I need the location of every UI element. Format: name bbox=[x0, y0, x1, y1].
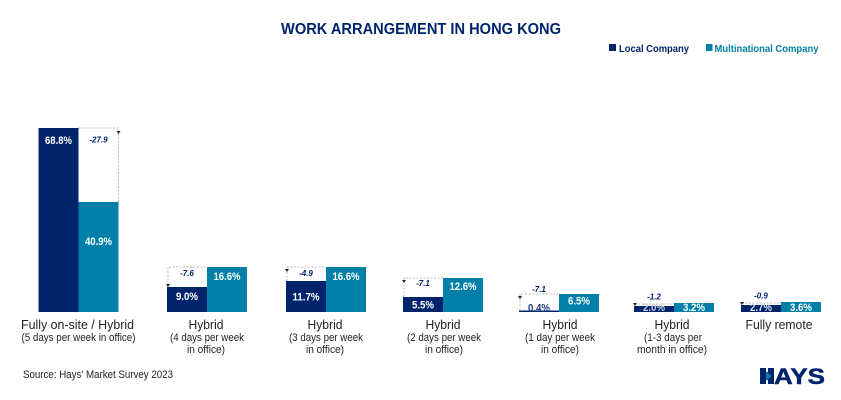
chart group: fully on-site: (5 days per week in office) bbox=[22, 332, 136, 344]
chart group: 3 days bbox=[285, 267, 366, 356]
chart group: 1 day bbox=[518, 285, 599, 356]
chart group: 4 days bbox=[166, 267, 247, 356]
chart group: 2 days: (2 days per week bbox=[407, 332, 481, 344]
chart group: 2 days: 12.6% bbox=[450, 281, 477, 293]
chart group: 1 day: 6.5% bbox=[568, 296, 590, 308]
chart group: 1-3 days per month: month in office) bbox=[637, 344, 707, 356]
chart group: 1-3 days per month: (1-3 days per bbox=[644, 332, 702, 344]
chart group: 2 days: -7.1 bbox=[416, 279, 430, 288]
chart group: fully on-site: -27.9 bbox=[89, 136, 108, 144]
chart group: 2 days: 5.5% bbox=[412, 300, 434, 312]
chart group: 1 day: -7.1 bbox=[532, 285, 546, 294]
chart group: 3 days: (3 days per week bbox=[289, 332, 363, 344]
chart group: 4 days: 16.6% bbox=[214, 271, 241, 283]
chart group: 1 day: (1 day per week bbox=[525, 332, 595, 344]
legend: Local Company bbox=[619, 43, 689, 55]
title: WORK ARRANGEMENT IN HONG KONG bbox=[281, 21, 561, 38]
source note: Source: Hays' Market Survey 2023 bbox=[23, 369, 173, 381]
chart group: 3 days: in office) bbox=[306, 344, 344, 356]
chart group: 4 days: (4 days per week bbox=[170, 332, 244, 344]
legend: Multinational Company bbox=[714, 43, 819, 55]
chart group: fully remote: Fully remote bbox=[746, 317, 812, 332]
logo: Hays bbox=[760, 364, 825, 389]
chart group: 4 days: Hybrid bbox=[188, 317, 224, 332]
chart group: fully on-site: 68.8% bbox=[45, 135, 72, 147]
chart group: fully remote: -0.9 bbox=[754, 292, 768, 300]
chart group: 1-3 days per month: -1.2 bbox=[647, 292, 661, 302]
logo: Hays: AYS bbox=[774, 364, 825, 389]
chart group: 1-3 days per month: 3.2% bbox=[683, 302, 705, 314]
chart group: 3 days: -4.9 bbox=[299, 269, 313, 278]
chart group: 3 days: Hybrid bbox=[308, 317, 342, 332]
legend bbox=[609, 43, 819, 55]
chart group: 3 days: 16.6% bbox=[332, 271, 360, 283]
chart group: 4 days: 9.0% bbox=[176, 291, 198, 303]
chart group: fully on-site: Fully on-site / Hybrid bbox=[21, 317, 134, 332]
chart group: 1-3 days per month: Hybrid bbox=[654, 317, 690, 332]
chart group: fully on-site: 40.9% bbox=[85, 236, 112, 248]
chart group: fully remote: 3.6% bbox=[790, 302, 812, 314]
chart group: 1-3 days per month: 2.0% bbox=[643, 302, 665, 314]
chart group: fully remote: 2.7% bbox=[750, 302, 772, 314]
chart group: 2 days bbox=[402, 278, 483, 356]
chart group: 4 days: in office) bbox=[187, 344, 225, 356]
chart group: fully remote bbox=[740, 292, 821, 332]
chart group: 3 days: 11.7% bbox=[292, 292, 320, 304]
chart group: 1 day: in office) bbox=[541, 344, 579, 356]
chart group: 2 days: in office) bbox=[425, 344, 463, 356]
chart group: 2 days: Hybrid bbox=[426, 317, 460, 332]
chart group: 1-3 days per month bbox=[633, 292, 714, 356]
chart group: 1 day: Hybrid bbox=[542, 317, 578, 332]
chart group: 1 day: 0.4% bbox=[528, 302, 550, 314]
chart group: fully on-site bbox=[21, 128, 136, 344]
chart group: 4 days: -7.6 bbox=[180, 269, 194, 278]
